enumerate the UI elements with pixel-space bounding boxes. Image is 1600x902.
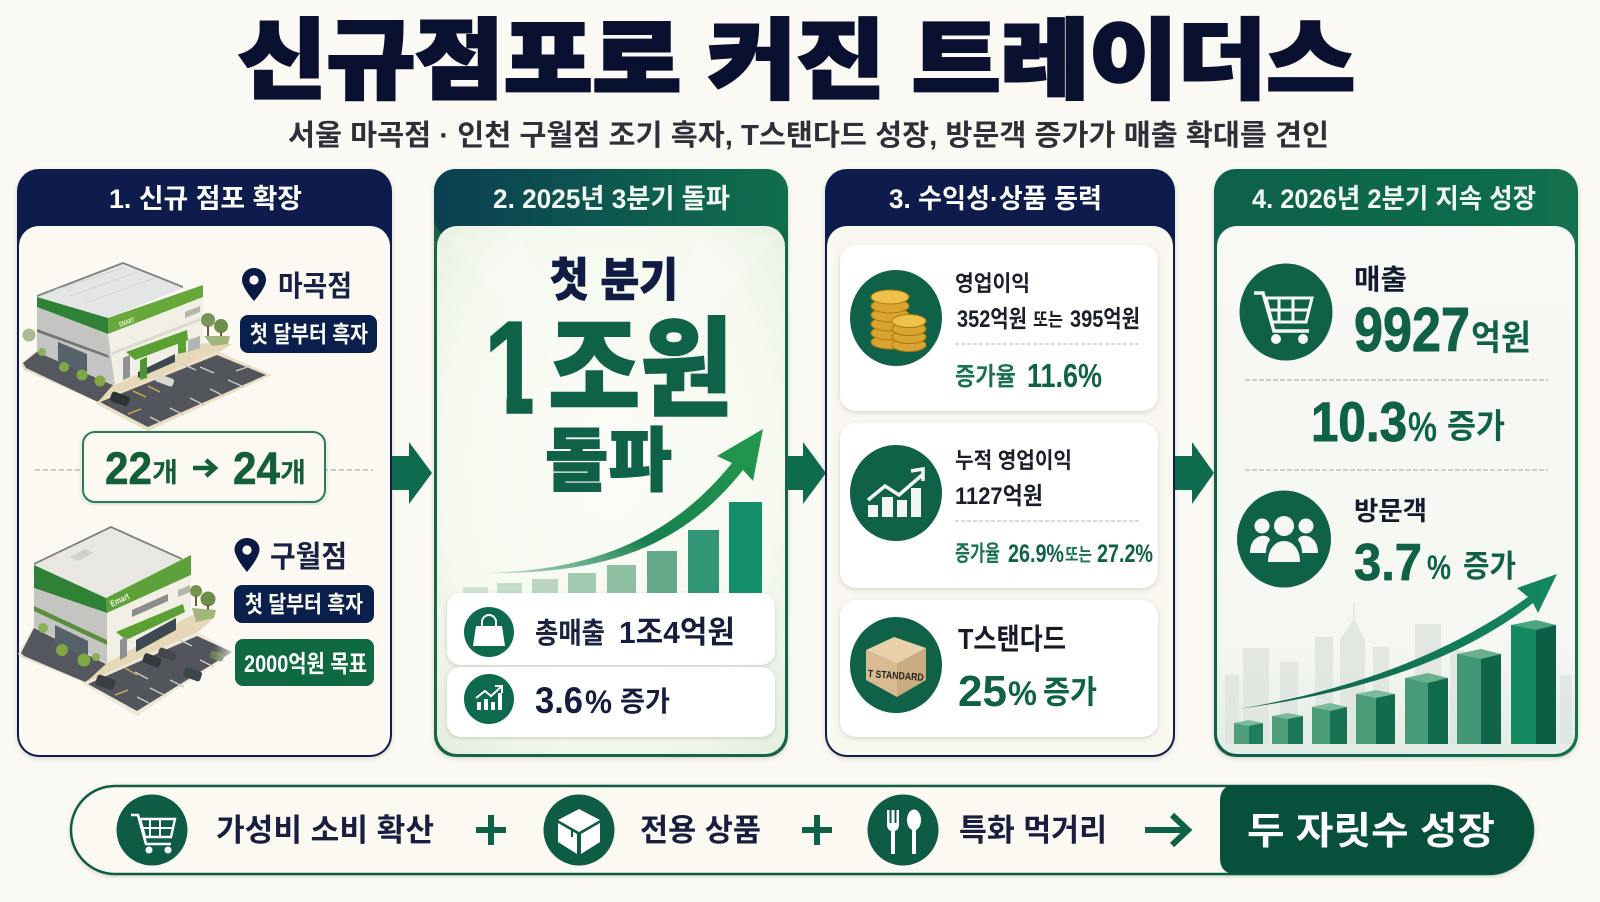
arrow: panel 2 to 3: [788, 442, 826, 504]
panel 3: profitability and product drivers: [825, 169, 1175, 757]
text: 3.6 percent increase: %: [585, 684, 612, 720]
text: cumulative profit values: 1127억원: [955, 483, 1043, 510]
metric: 10.3 percent increase: 증가: [1447, 408, 1505, 446]
icon: cart: [116, 794, 188, 866]
bar chart: 3D rising bars: [1234, 620, 1556, 744]
icon: shopping bag: [464, 607, 514, 657]
text: sales: 매출: [1354, 264, 1407, 295]
badge: Magok first-month profit: 첫 달부터 흑자: [250, 321, 368, 347]
metric: 992.7 billion won: 억원: [1471, 319, 1531, 358]
illustration: Guwol store building: [18, 526, 240, 716]
metric: 3.7 percent increase: %: [1427, 549, 1451, 587]
text: T Standard growth: [958, 623, 1097, 716]
metric: 3.7 percent increase: 증가: [1463, 549, 1516, 584]
title: 신규점포로 커진 트레이더스: [238, 13, 1355, 110]
result box: double-digit growth: [1220, 785, 1533, 874]
text: operating profit values: 395억원: [1070, 306, 1140, 333]
store name: Guwol: 구월점: [270, 541, 347, 574]
icon: location pin Guwol: [234, 538, 260, 572]
text: operating profit values: [955, 271, 1140, 394]
icon: T Standard box: [850, 617, 942, 713]
text: operating profit values: 352억원: [957, 306, 1027, 333]
icon: box: [544, 794, 614, 866]
card: operating profit: [840, 245, 1158, 411]
text: operating profit values: 영업이익: [955, 271, 1030, 296]
bar chart: rising bars: [463, 502, 762, 593]
metric: 10.3 percent increase: %: [1408, 403, 1437, 450]
text: value consumption: 가성비 소비 확산: [216, 813, 434, 848]
panel 2 heading: 2. 2025년 3분기 돌파: [493, 184, 730, 214]
metric: 10.3 percent increase: 10.3: [1311, 390, 1407, 453]
text: total sales figure: 총매출: [535, 617, 605, 650]
panel 4: Q2 2026 continued growth: [1214, 169, 1578, 757]
callout: store count: 개: [152, 458, 178, 488]
card: growth rate: [447, 667, 775, 737]
headline: 1 trillion won: [482, 294, 733, 441]
callout: store count: 22: [105, 443, 152, 494]
store name: Magok: 마곡점: [278, 270, 352, 303]
text: T Standard growth: 25: [958, 667, 1007, 716]
text: 3.6 percent increase: 3.6: [535, 680, 583, 721]
text: cumulative profit values: 또는: [1065, 545, 1092, 565]
arrow: panel 1 to 2: [392, 442, 432, 504]
callout: store count: 개: [280, 458, 306, 488]
arrow: panel 3 to 4: [1175, 442, 1214, 504]
text: cumulative profit values: 누적 영업이익: [955, 448, 1072, 473]
badge: 200 billion target: [235, 639, 374, 686]
icon: visitors: [1237, 490, 1331, 588]
text: T Standard growth: T스탠다드: [958, 623, 1066, 656]
icon: plus: [476, 815, 506, 845]
arrow: growth: [488, 429, 763, 573]
text: exclusive products: 전용 상품: [640, 813, 761, 848]
headline: 1 trillion won: 1: [484, 294, 540, 441]
icon: growth chart: [464, 674, 514, 724]
illustration: Magok store building: EMART: [118, 317, 136, 329]
metric: 3.7 percent increase: [1354, 534, 1516, 592]
text: T Standard growth: %: [1008, 675, 1037, 713]
illustration: city skyline: [1225, 603, 1572, 744]
text: 3.6 percent increase: [535, 680, 670, 721]
illustration: Guwol store building: Emart: [108, 591, 131, 609]
badge: Guwol first-month profit: [234, 585, 374, 623]
panel 3 heading: 3. 수익성·상품 동력: [889, 184, 1102, 214]
panel 2: Q3 2025 breakthrough: [434, 169, 788, 757]
card: T Standard: [840, 600, 1158, 737]
text: cumulative profit values: 26.9%: [1008, 540, 1064, 568]
headline: 1 trillion won: 조원: [548, 309, 733, 430]
text: operating profit values: 또는: [1033, 309, 1063, 331]
text: operating profit values: 증가율: [955, 363, 1016, 391]
result box: double-digit growth: 두 자릿수 성장: [1247, 811, 1495, 853]
text: 3.6 percent increase: 증가: [620, 686, 670, 717]
text: cumulative profit values: [955, 448, 1153, 568]
badge: Magok first-month profit: [240, 315, 377, 353]
bottom bar: growth formula: [71, 785, 1533, 874]
divider: lower dashed line: [1245, 469, 1548, 471]
illustration: Magok store building: [21, 262, 272, 431]
headline: breakthrough: 돌파: [545, 422, 672, 500]
divider: dashed line: [35, 469, 373, 471]
headline: first quarter: 첫 분기: [550, 254, 678, 306]
panel 1 heading: 1. 신규 점포 확장: [109, 184, 302, 214]
text: cumulative profit values: 27.2%: [1097, 540, 1153, 568]
badge: 200 billion target: 2000억원 목표: [244, 651, 367, 678]
divider: upper dashed line: [1245, 379, 1548, 381]
callout: store count: [83, 432, 325, 502]
arrow: growth: [1238, 574, 1557, 709]
icon: fork and spoon: [868, 794, 938, 866]
text: cumulative profit values: 증가율: [955, 541, 1000, 566]
icon: shopping cart: [1240, 264, 1332, 360]
text: visitors: 방문객: [1354, 496, 1427, 526]
text: total sales figure: 1조4억원: [619, 615, 735, 650]
text: operating profit values: 11.6%: [1027, 357, 1102, 394]
panel 1: new store expansion: [17, 169, 392, 757]
metric: 992.7 billion won: 9927: [1354, 296, 1470, 365]
metric: 3.7 percent increase: 3.7: [1354, 534, 1422, 592]
text: total sales figure: [535, 615, 735, 650]
icon: arrow to result: [1145, 815, 1188, 845]
card: total sales: [447, 593, 775, 665]
text: T Standard growth: 증가: [1043, 674, 1097, 710]
text: specialized food: 특화 먹거리: [959, 813, 1107, 848]
icon: growth chart: [850, 445, 942, 541]
icon: coin stacks: [850, 270, 942, 366]
panel 4 heading: 4. 2026년 2분기 지속 성장: [1252, 184, 1536, 214]
icon: plus: [802, 815, 832, 845]
icon: location pin Magok: [242, 268, 266, 301]
badge: Guwol first-month profit: 첫 달부터 흑자: [245, 591, 363, 617]
subtitle: 서울 마곡점 · 인천 구월점 조기 흑자, T스탠다드 성장, 방문객 증가가 매출 확대를 견인: [288, 119, 1329, 152]
callout: store count: 24: [233, 443, 280, 494]
card: cumulative operating profit: [840, 423, 1158, 588]
metric: 10.3 percent increase: [1311, 390, 1505, 453]
icon: T Standard box: T STANDARD: [867, 668, 924, 684]
